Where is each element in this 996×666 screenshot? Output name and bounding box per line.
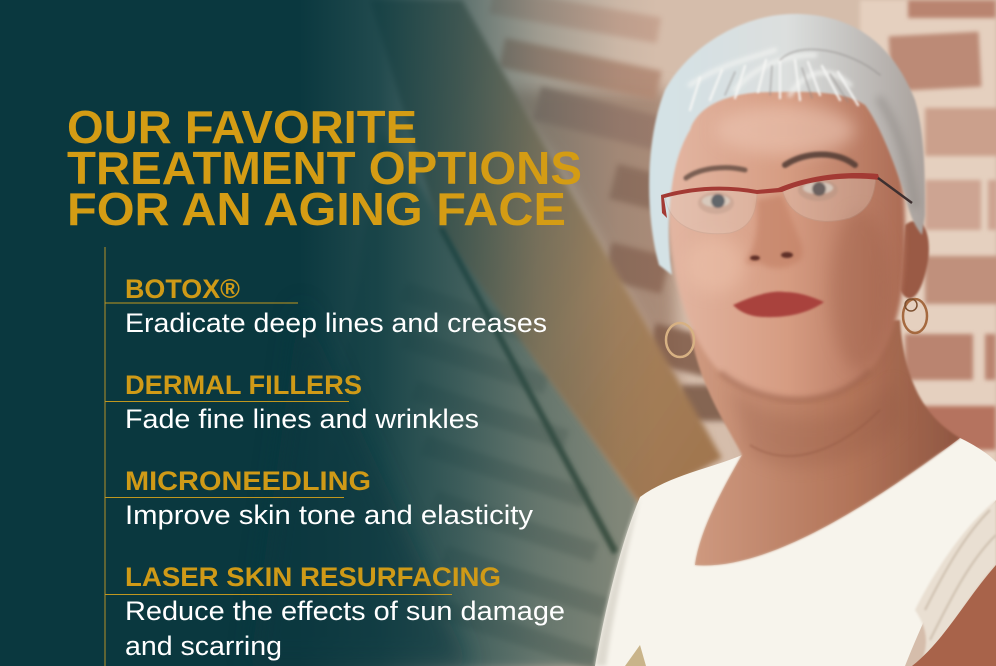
- title: [67, 101, 582, 235]
- beam shadow line: [438, 228, 618, 555]
- item: Dermal Fillers: Fade fine lines and wrinkles: [125, 404, 479, 434]
- wooden beam: [370, 0, 722, 505]
- item: Microneedling: [105, 466, 534, 530]
- shirt: [595, 438, 996, 666]
- item: Laser Skin Resurfacing: Reduce the effects of sun damage: [125, 596, 565, 626]
- ears: [900, 221, 929, 298]
- item: Laser Skin Resurfacing: LASER SKIN RESURFACING: [125, 562, 501, 592]
- vertical gold rule: [104, 247, 106, 666]
- face: [668, 90, 906, 399]
- item: Dermal Fillers: [105, 370, 479, 434]
- title: FOR AN AGING FACE: [67, 183, 566, 235]
- item: Botox: [105, 274, 547, 338]
- item: Microneedling: Improve skin tone and elasticity: [125, 500, 534, 530]
- title: TREATMENT OPTIONS: [67, 142, 582, 194]
- face shading: [685, 105, 890, 399]
- neck and chest: [690, 320, 960, 565]
- hair strands: [690, 49, 915, 205]
- lower blurred wall: [300, 130, 640, 666]
- eyes: [698, 179, 838, 214]
- woman portrait: [595, 14, 996, 666]
- nose: [746, 195, 803, 268]
- item: Botox: Eradicate deep lines and creases: [125, 308, 547, 338]
- earrings: [666, 299, 927, 357]
- lower teal shading: [250, 300, 470, 666]
- title: OUR FAVORITE: [67, 101, 417, 153]
- glasses: [661, 173, 912, 234]
- hair: [649, 14, 925, 275]
- eyebrows: [686, 154, 855, 178]
- item: Dermal Fillers: DERMAL FILLERS: [125, 370, 362, 400]
- item: Microneedling: MICRONEEDLING: [125, 466, 371, 496]
- lips: [733, 292, 824, 317]
- arm: [912, 565, 996, 666]
- item: Botox: BOTOX®: [125, 274, 240, 304]
- mid wall darker tone: [500, 90, 700, 470]
- item: Laser Skin Resurfacing: [105, 562, 565, 661]
- blurred far bricks: [489, 0, 730, 421]
- item: Laser Skin Resurfacing: and scarring: [125, 631, 282, 661]
- right sharp brick wall: [860, 0, 996, 480]
